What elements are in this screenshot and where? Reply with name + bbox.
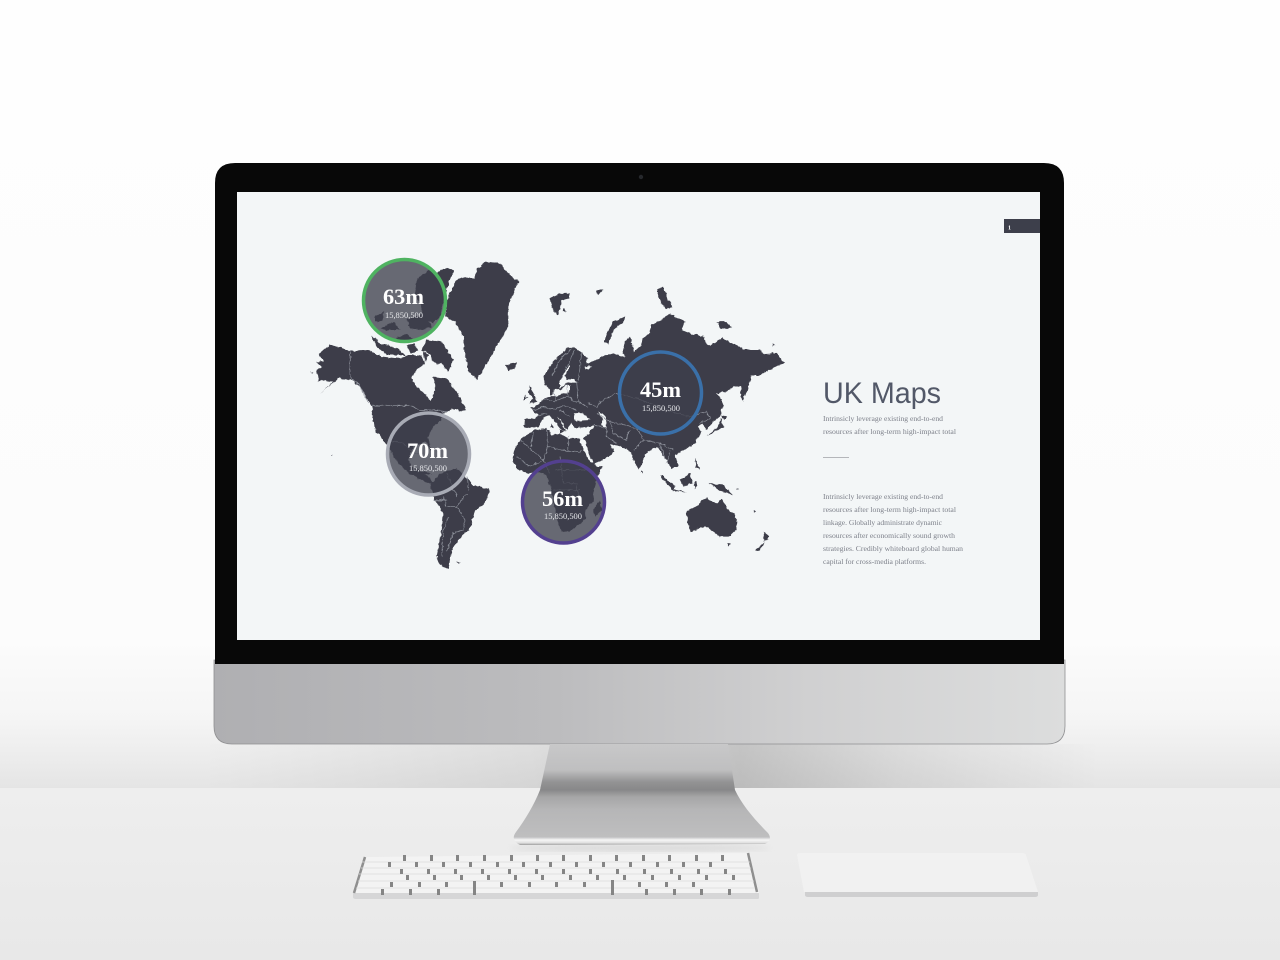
- callout: 63m: 63m: [383, 284, 424, 309]
- monitor bezel: [215, 163, 1064, 664]
- trackpad: [797, 853, 1038, 897]
- subtitle text: Intrinsicly leverage existing end-to-end: [823, 414, 943, 423]
- callout: 70m: [388, 413, 470, 495]
- callout: 56m: 56m: [542, 486, 583, 511]
- body paragraph: [823, 492, 963, 566]
- page number tag: [1004, 219, 1040, 233]
- keyboard: [353, 853, 759, 899]
- callout: 70m: 15,850,500: [409, 463, 447, 473]
- camera: [639, 175, 643, 179]
- callout: 45m: 45m: [640, 377, 681, 402]
- callout: 70m: 70m: [407, 438, 448, 463]
- page number tag: 1: [1008, 226, 1011, 232]
- body paragraph: linkage. Globally administrate dynamic: [823, 518, 943, 527]
- callout: 56m: 15,850,500: [544, 511, 582, 521]
- eurasia africa and oceania: [513, 287, 785, 552]
- monitor chin: [214, 660, 1065, 744]
- body paragraph: resources after economically sound growth: [823, 531, 955, 540]
- callout: 45m: 15,850,500: [642, 403, 680, 413]
- callout: 45m: [620, 352, 702, 434]
- monitor: [214, 163, 1065, 845]
- world map: [310, 262, 785, 570]
- subtitle text: [823, 414, 957, 436]
- screen slide: [237, 192, 1040, 640]
- callout: 56m: [522, 461, 604, 543]
- stand: [514, 744, 770, 845]
- body paragraph: strategies. Credibly whiteboard global human: [823, 544, 963, 553]
- body paragraph: capital for cross-media platforms.: [823, 557, 926, 566]
- callout: 63m: 15,850,500: [385, 310, 423, 320]
- body paragraph: Intrinsicly leverage existing end-to-end: [823, 492, 943, 501]
- subtitle text: resources after long-term high-impact total: [823, 427, 957, 436]
- callout: 63m: [364, 260, 446, 342]
- body paragraph: resources after long-term high-impact total: [823, 505, 957, 514]
- title: UK Maps: [823, 377, 941, 410]
- americas and greenland: [310, 262, 518, 570]
